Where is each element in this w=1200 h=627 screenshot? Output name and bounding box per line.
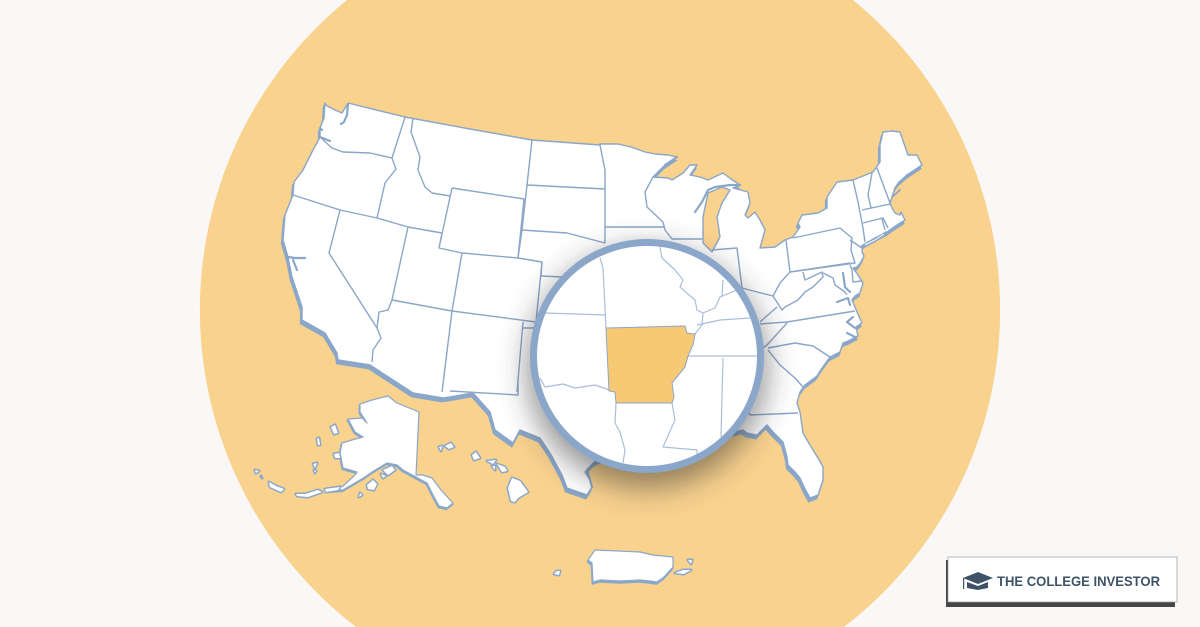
Puerto Rico <box>587 550 673 584</box>
logo badge <box>946 557 1177 607</box>
icon: graduation cap <box>963 572 993 590</box>
brand name: THE COLLEGE INVESTOR <box>997 573 1160 589</box>
Alaska, Hawaii and Caribbean islands <box>255 425 692 575</box>
Lake Michigan <box>703 187 730 252</box>
neighbouring state borders <box>540 247 757 463</box>
Alaska <box>326 396 453 509</box>
magnifier lens <box>534 242 760 470</box>
Arkansas <box>606 326 695 403</box>
gold circle <box>200 0 1000 627</box>
state borders <box>293 117 890 415</box>
contiguous United States <box>282 103 922 502</box>
magnifier shadow <box>527 248 767 488</box>
Long Island <box>865 234 884 245</box>
coastal inlets and bays <box>288 104 907 487</box>
magnifier ring <box>534 242 760 470</box>
